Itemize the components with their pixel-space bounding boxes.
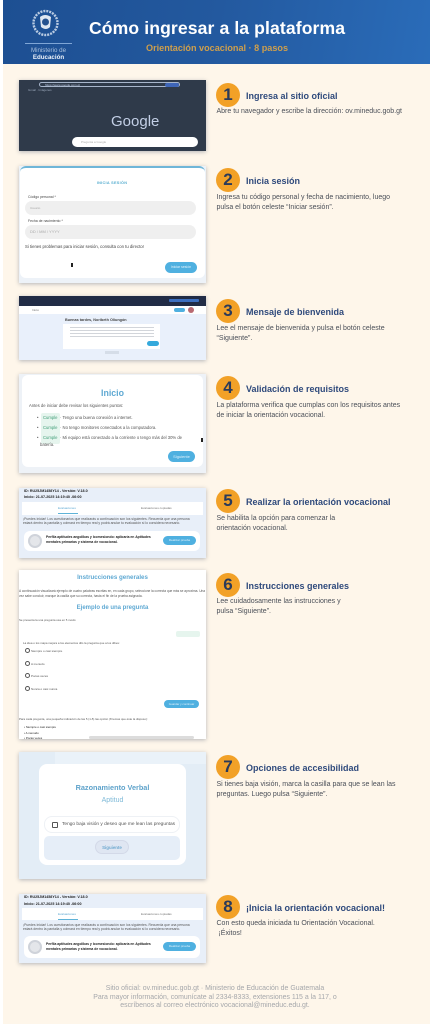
panel: screenshot 2 login [19, 166, 206, 283]
browser bar: https://www.google.com.gt [45, 82, 80, 86]
requirement rows: Cumple [43, 425, 57, 430]
checkbox [52, 822, 58, 828]
date field [25, 225, 196, 239]
test text [46, 942, 151, 951]
message text [70, 327, 154, 339]
step 4 text: de iniciar la orientación vocacional. [216, 412, 325, 419]
answer option 3 [25, 673, 30, 678]
pale label [105, 351, 119, 354]
step 2 number: 2 [223, 170, 233, 189]
ministry name [31, 47, 66, 60]
step 5 text: orientación vocacional. [216, 525, 288, 532]
step 1 number: 1 [223, 85, 233, 104]
search box [72, 137, 198, 147]
Google logo: Google [111, 113, 159, 130]
step 3 number: 3 [223, 301, 233, 320]
emblem [28, 534, 42, 548]
test card [24, 531, 200, 551]
card heading: INICIA SESIÓN [97, 181, 127, 185]
test text: mentales primarias y sistema de vocacional. [46, 947, 118, 951]
answer label 3: Pocas veces [31, 674, 48, 678]
footer note: Para cada pregunta, una pequeña indicación de las 5 (1-5) las opción (8 temas que éste la dispuso): [19, 717, 148, 721]
notice: ¡Puedes iniciar! Los cuestionarios que realizarás a continuación son los siguientes. Recuerda que una persona [23, 517, 190, 521]
answer label 4: Nunca o casi nunca [31, 686, 57, 690]
step 5 text [216, 514, 336, 532]
heading: Razonamiento Verbal [76, 783, 149, 792]
requirement rows: Cumple [43, 415, 57, 420]
start button [163, 942, 196, 951]
code field [25, 201, 196, 215]
intro: vez sabe concluir, marque la casilla que su correcta, hasta el fin de la prueba asignada. [19, 594, 142, 598]
start button [163, 536, 196, 545]
step 2 title: Inicia sesión [246, 176, 300, 186]
browser button [165, 82, 179, 86]
logo divider [25, 43, 72, 44]
date label: Fecha de nacimiento * [28, 219, 63, 223]
ministry name: Educación [33, 54, 64, 60]
heading: Instrucciones generales [77, 574, 148, 581]
next button [95, 840, 129, 854]
step 6 text: pulsa “Siguiente”. [216, 608, 271, 615]
requirement rows: batería. [40, 442, 54, 447]
notice: ¡Puedes iniciar! Los cuestionarios que realizarás a continuación son los siguientes. Recuerda que una persona [23, 923, 190, 927]
answer option 1 [25, 648, 30, 653]
panel: screenshot 5 orientation [19, 488, 206, 558]
step 6 text [216, 598, 341, 615]
icon: cursor [201, 438, 203, 442]
tabs [22, 908, 203, 920]
requirement rows: · Tengo una buena conexión a internet. [60, 415, 133, 420]
step 1 text: Abre tu navegador y escribe la dirección: ov.mineduc.gob.gt [216, 108, 402, 115]
step 3 text [216, 324, 385, 342]
profile button [174, 308, 185, 312]
example heading: Ejemplo de una pregunta [77, 605, 148, 611]
step 2 text [216, 194, 390, 211]
step 3 text: Lee el mensaje de bienvenida y pulsa el botón celeste [216, 325, 385, 332]
panel: screenshot 8 start [19, 894, 206, 963]
requirement rows [37, 413, 182, 447]
step 5 title: Realizar la orientación vocacional [246, 496, 391, 506]
step 1 title: Ingresa al sitio oficial [246, 90, 338, 100]
ministry name: Ministerio de [31, 47, 66, 54]
question: La idea o los mapa mejora a los elementos dilo la pregunta que a los dibes: [23, 641, 120, 645]
message card [63, 324, 160, 349]
answer label 2: A menudo [31, 662, 45, 666]
step 2 number [216, 168, 240, 192]
tabs: Evaluaciones [58, 912, 76, 916]
code label: Código personal * [28, 195, 56, 199]
date field: DD / MM / YYYY [30, 229, 60, 234]
step 8 title: ¡Inicia la orientación vocacional! [246, 902, 385, 912]
step 5 text: Se habilita la opción para comenzar la [216, 515, 335, 522]
greeting: Buenas tardes, Noribeth Oliungón [65, 318, 127, 322]
login button: Iniciar sesión [171, 265, 191, 269]
browser bar [39, 82, 180, 87]
notice [23, 923, 190, 931]
step 6 number [216, 573, 240, 597]
panel: screenshot 4 requirements [19, 374, 206, 473]
id line: ID: RU25JM1458Y14 - Versión: V.18.0 [24, 895, 88, 899]
tabs [22, 502, 203, 515]
step 8 text: ¡Éxitos! [218, 930, 242, 937]
step 4 number: 4 [223, 378, 233, 397]
tabs: Evaluaciones copiadas [141, 912, 172, 916]
step 2 text: pulsa el botón celeste “Iniciar sesión”. [216, 204, 334, 211]
footer list: • Siempre o casi siempre [24, 725, 56, 729]
subtitle: Orientación vocacional · 8 pasos [146, 43, 288, 53]
test text: Perfila aptitudes angolikas y lcomesiondo: aplicaría en Aptitudes [46, 942, 151, 946]
step 4 title: Validación de requisitos [246, 384, 349, 394]
center card [39, 764, 186, 865]
chrome buttons [169, 299, 199, 302]
step 7 text: Si tienes baja visión, marca la casilla para que se lean las [216, 781, 396, 788]
start button: Realizar prueba [169, 538, 190, 542]
answer option 4 [25, 686, 30, 691]
icon: coat of arms [32, 10, 59, 36]
step 8 number: 8 [223, 897, 233, 916]
login card [20, 166, 205, 278]
tabs: Evaluaciones copiadas [141, 506, 172, 510]
tabs: Evaluaciones [58, 506, 76, 510]
example note: Se presenta la una pregunta usa en 5 modo: [19, 618, 76, 622]
panel: screenshot 6 instructions [19, 570, 206, 739]
step 7 text: preguntas. Luego pulsa “Siguiente”. [216, 791, 327, 798]
notice [23, 517, 190, 525]
test text: Perfila aptitudes angolikas y lcomesiondo: aplicaría en Aptitudes [46, 535, 151, 539]
step 7 number [216, 755, 240, 779]
step 5 number: 5 [223, 491, 233, 510]
help text: Si tienes problemas para iniciar sesión, consulta con tu director [25, 244, 144, 249]
step 3 title: Mensaje de bienvenida [246, 306, 344, 316]
test text [46, 535, 151, 544]
footer: escríbenos al correo electrónico vocacional@mineduc.edu.gt. [120, 1002, 310, 1009]
subheading: Aptitud [102, 797, 123, 804]
heading: Inicio [101, 388, 124, 398]
bottom shadow [89, 736, 194, 739]
continue button: Guardar y continuar [169, 702, 194, 706]
step 8 text: Con esto queda iniciada tu Orientación Vocacional. [216, 920, 375, 927]
title: Cómo ingresar a la plataforma [89, 18, 345, 38]
icon: cursor [71, 263, 73, 267]
requirement rows: · Mi equipo está conectado a la corriente o tengo más del 30% de [60, 435, 182, 440]
notice: estará dentro la pantalla y colmará en tiempo real y podrá anular tu evaluación si lo considera necesario. [23, 927, 180, 931]
step 3 number [216, 299, 240, 323]
button area [44, 836, 180, 860]
step 4 number [216, 376, 240, 400]
requirement rows: • [37, 435, 38, 440]
step 8 number [216, 895, 240, 919]
step 7 title: Opciones de accesibilidad [246, 762, 359, 772]
code field: Usuario [30, 206, 40, 210]
continue button [164, 700, 199, 708]
step 6 title: Instrucciones generales [246, 580, 349, 590]
requirement rows: • [37, 415, 38, 420]
step 5 number [216, 489, 240, 513]
requirement rows: · No tengo monitores conectados a la computadora. [60, 425, 156, 430]
date line: Inicio: 21-07-2025 14:19:40 -06:00 [24, 902, 81, 906]
step 6 text: Lee cuidadosamente las instrucciones y [216, 598, 341, 605]
status tag [176, 631, 200, 637]
step 2 text: Ingresa tu código personal y fecha de nacimiento, luego [216, 194, 390, 201]
footer: Sitio oficial: ov.mineduc.gob.gt · Ministerio de Educación de Guatemala [106, 985, 324, 992]
option text: Tengo baja visión y deseo que me lean las preguntas [62, 822, 175, 827]
step 6 number: 6 [223, 575, 233, 594]
panel: screenshot 3 welcome [19, 296, 206, 360]
card [22, 375, 203, 467]
requirement rows: Cumple [43, 435, 57, 440]
nav bar: Inicio [32, 308, 39, 312]
step 3 text: “Siguiente”. [216, 335, 252, 342]
notice: estará dentro la pantalla y colmará en tiempo real y podrá anular tu evaluación si lo considera necesario. [23, 521, 180, 525]
start button: Realizar prueba [169, 944, 190, 948]
footer list: • A menudo [24, 730, 39, 734]
id line: ID: RU25JM1458Y14 - Versión: V.18.0 [24, 489, 88, 493]
bookmarks row: Gmail · Imágenes [28, 88, 52, 92]
footer list [24, 725, 56, 739]
intro: A continuación visualizará ejemplo de cuatro palabras escritas en, en cada grupo, seleccione la correcta que más se aproxima. Una [19, 589, 205, 593]
panel: screenshot 7 accessibility [19, 752, 206, 879]
panel: screenshot 1 Google [19, 80, 206, 151]
header banner [3, 0, 430, 64]
step 4 text [216, 402, 400, 419]
search box: Pregunta a Google [81, 140, 106, 144]
emblem [28, 940, 42, 954]
date line: Inicio: 21-07-2025 14:19:40 -06:00 [24, 495, 81, 499]
avatar [188, 307, 194, 313]
answer label 1: Siempre o casi siempre [31, 648, 62, 652]
test card [24, 936, 200, 958]
answer option 2 [25, 661, 30, 666]
step 1 number [216, 83, 240, 107]
next button [168, 451, 195, 462]
next button: Siguiente [102, 845, 122, 850]
intro: Antes de iniciar debe revisar los siguientes puntos: [29, 403, 123, 408]
step 7 number: 7 [223, 757, 233, 776]
option row [44, 816, 180, 833]
next button [147, 341, 159, 346]
requirement rows: • [37, 425, 38, 430]
step 4 text: La plataforma verifica que cumplas con los requisitos antes [216, 402, 400, 409]
step 8 text [216, 920, 375, 937]
test text: mentales primarias y sistema de vocacional. [46, 540, 118, 544]
pale background band [55, 752, 206, 764]
intro [19, 589, 205, 598]
next button: Siguiente [173, 454, 190, 459]
nav bar [19, 306, 206, 314]
footer [93, 984, 337, 1009]
login button [165, 262, 197, 273]
footer: Para mayor información, comunícate al 2334-8333, extensiones 115 a la 117, o [93, 994, 337, 1000]
browser chrome [19, 296, 206, 306]
step 7 text [216, 780, 396, 798]
